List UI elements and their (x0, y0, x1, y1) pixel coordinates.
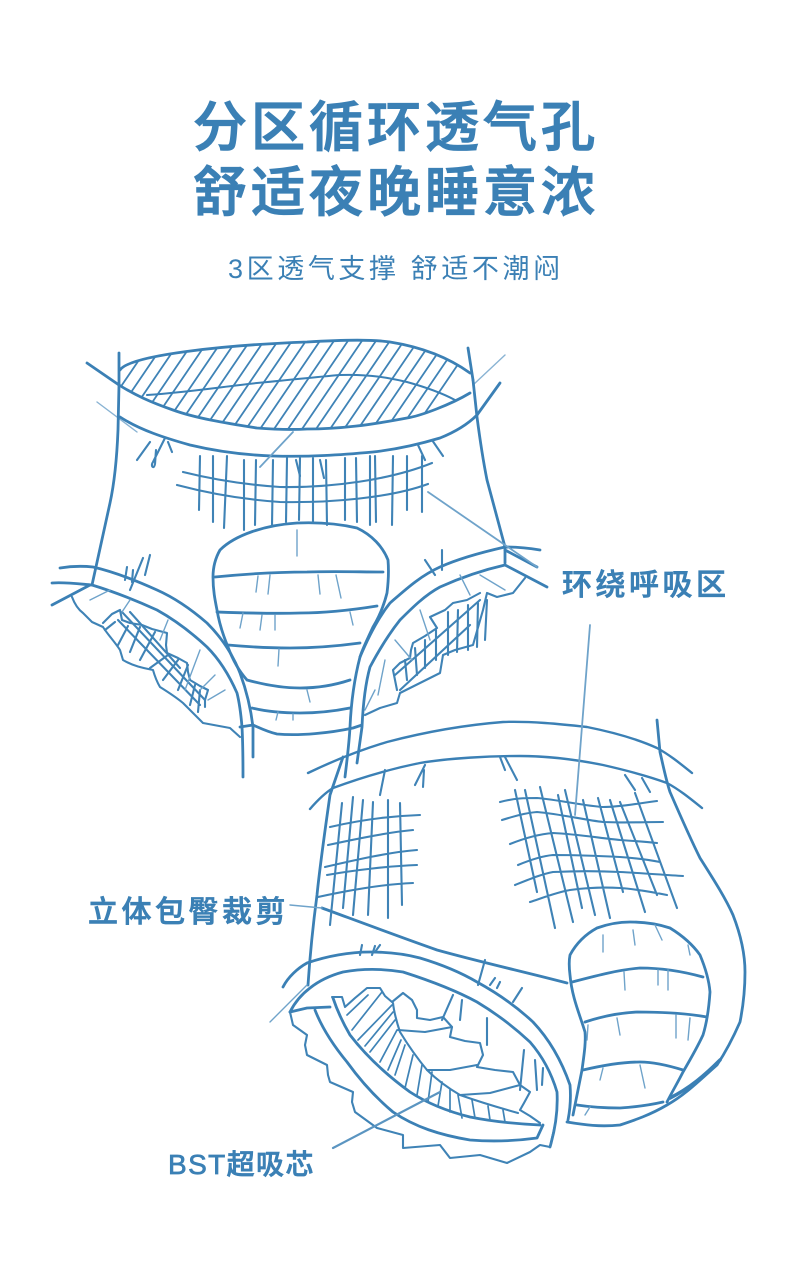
waist hatching (121, 342, 458, 428)
core folds back (585, 925, 690, 1115)
grid right back (500, 787, 683, 928)
core hatching back (347, 992, 505, 1122)
back view of pants (270, 625, 745, 1163)
subtitle: 3区透气支撑 舒适不潮闷 (228, 254, 564, 284)
core folds (240, 530, 353, 720)
title line 2: 舒适夜晚睡意浓 (193, 163, 599, 223)
frills left (72, 590, 240, 737)
body outline (92, 380, 505, 585)
label: 3D hip cut: 立体包臀裁剪 (88, 896, 289, 929)
body outline back (308, 720, 745, 1126)
fold marks back (360, 757, 650, 1090)
front view of pants (52, 332, 547, 777)
crotch core (213, 523, 388, 713)
waistband back (308, 722, 702, 809)
crotch bottom (240, 725, 362, 735)
fold marks front (125, 438, 443, 590)
grid front (177, 463, 432, 502)
outer frill back (290, 1012, 555, 1163)
inner frill back (332, 988, 540, 1123)
grid left back (318, 797, 420, 925)
leg band back (283, 952, 570, 1147)
core back (569, 922, 710, 1115)
label: surround breathing zone: 环绕呼吸区 (562, 569, 730, 602)
title line 1: 分区循环透气孔 (193, 98, 599, 158)
waistband (87, 340, 505, 456)
leg band left (52, 566, 253, 777)
leader lines back (575, 625, 590, 815)
leader lines front (260, 432, 537, 567)
label: BST core: BST超吸芯 (168, 1149, 315, 1180)
line art illustrations (50, 338, 746, 1164)
frills right (365, 575, 525, 715)
leg band right (345, 547, 547, 777)
